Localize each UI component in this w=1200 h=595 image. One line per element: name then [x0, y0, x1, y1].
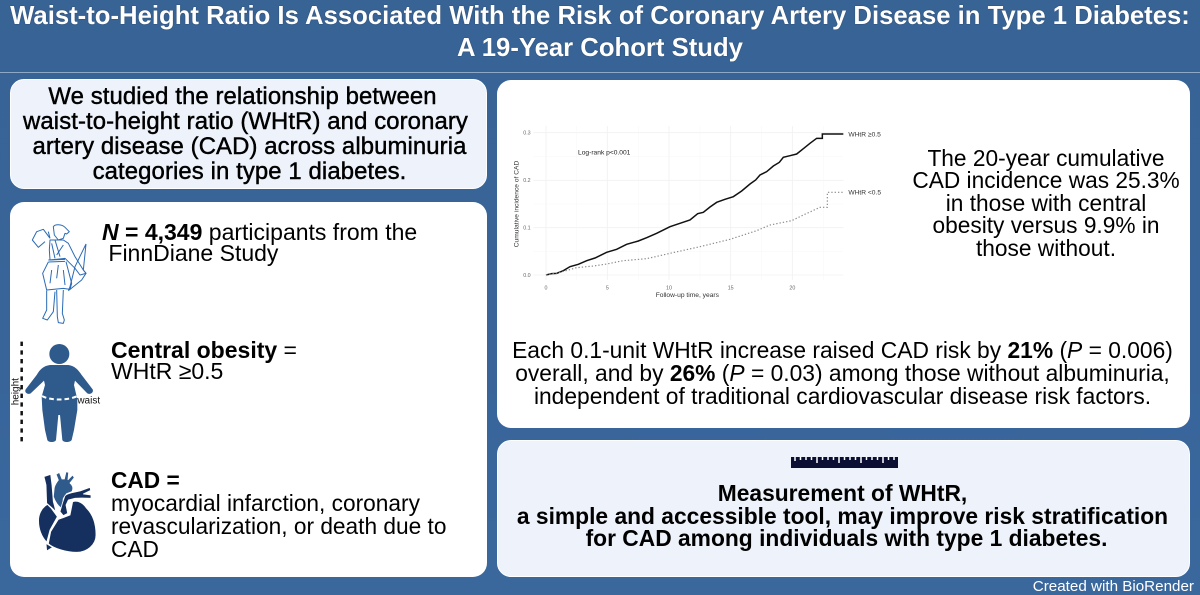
risk increase text: independent of traditional cardiovascular disease risk factors. — [534, 383, 1151, 409]
CAD definition text: revascularization, or death due to — [111, 512, 446, 538]
chart: cumulative incidence of CAD: WHtR <0.5 — [848, 190, 881, 197]
study aim text: waist-to-height ratio (WHtR) and coronary — [23, 108, 468, 135]
participants text: FinnDiane Study — [108, 240, 278, 266]
participants text — [102, 219, 417, 266]
incidence text: CAD incidence was 25.3% — [912, 167, 1180, 193]
panel: conclusion — [497, 440, 1190, 577]
conclusion text: for CAD among individuals with type 1 diabetes. — [586, 525, 1107, 551]
study aim text: categories in type 1 diabetes. — [93, 158, 406, 185]
panel: definitions — [10, 202, 487, 577]
chart: cumulative incidence of CAD: 20 — [789, 285, 795, 291]
chart: cumulative incidence of CAD: 0.0 — [523, 273, 531, 279]
incidence text: in those with central — [946, 190, 1146, 216]
central obesity text — [111, 337, 297, 384]
chart: cumulative incidence of CAD: 5 — [606, 285, 609, 291]
icon: central obesity figure with height and waist: height — [10, 378, 21, 405]
conclusion text — [517, 480, 1168, 551]
incidence text: those without. — [976, 234, 1116, 260]
panel: study aim — [10, 79, 487, 189]
CAD definition text: CAD = — [111, 466, 180, 492]
central obesity text: Central obesity = — [111, 337, 297, 363]
chart: cumulative incidence of CAD: Cumulative incidence of CAD — [513, 161, 520, 247]
CAD definition text: myocardial infarction, coronary — [111, 490, 420, 516]
CAD definition text: CAD — [111, 536, 159, 562]
incidence text: obesity versus 9.9% in — [932, 212, 1160, 238]
chart: cumulative incidence of CAD: 0.2 — [523, 178, 531, 184]
study aim text — [22, 83, 468, 185]
central obesity text: WHtR ≥0.5 — [111, 358, 223, 384]
title: A 19-Year Cohort Study — [457, 34, 743, 62]
title — [10, 2, 1190, 62]
chart: cumulative incidence of CAD: 0 — [545, 285, 548, 291]
incidence text: The 20-year cumulative — [927, 144, 1165, 170]
chart: cumulative incidence of CAD: 0.3 — [523, 130, 531, 136]
chart: cumulative incidence of CAD: 0.1 — [523, 225, 531, 231]
chart: cumulative incidence of CAD: WHtR ≥0.5 — [848, 132, 881, 139]
risk increase text: overall, and by 26% (P = 0.03) among those without albuminuria, — [515, 360, 1170, 386]
credit: Created with BioRender — [1033, 578, 1194, 595]
conclusion text: a simple and accessible tool, may improve risk stratification — [517, 502, 1168, 528]
chart: cumulative incidence of CAD: 15 — [728, 285, 734, 291]
study aim text: We studied the relationship between — [48, 83, 437, 110]
risk increase text: Each 0.1-unit WHtR increase raised CAD risk by 21% (P = 0.006) — [512, 337, 1173, 363]
icon: central obesity figure with height and waist — [10, 342, 100, 442]
risk increase text — [512, 337, 1173, 409]
chart: cumulative incidence of CAD — [513, 126, 881, 299]
title: Waist-to-Height Ratio Is Associated With the Risk of Coronary Artery Disease in Type 1 Diabetes: — [10, 2, 1190, 30]
incidence text — [912, 144, 1180, 260]
CAD definition text — [111, 466, 446, 562]
conclusion text: Measurement of WHtR, — [718, 480, 967, 506]
icon: Diana archer — [32, 224, 86, 324]
chart: cumulative incidence of CAD: 10 — [666, 285, 672, 291]
chart: cumulative incidence of CAD: Log-rank p<0.001 — [578, 149, 631, 156]
panel: results — [497, 80, 1190, 428]
chart: cumulative incidence of CAD: Follow-up time, years — [656, 292, 720, 299]
icon: central obesity figure with height and waist: waist — [76, 395, 100, 406]
study aim text: artery disease (CAD) across albuminuria — [32, 133, 467, 160]
icon: anatomical heart — [39, 472, 96, 552]
participants text: N = 4,349 participants from the — [102, 219, 417, 245]
icon: ruler — [791, 457, 898, 468]
